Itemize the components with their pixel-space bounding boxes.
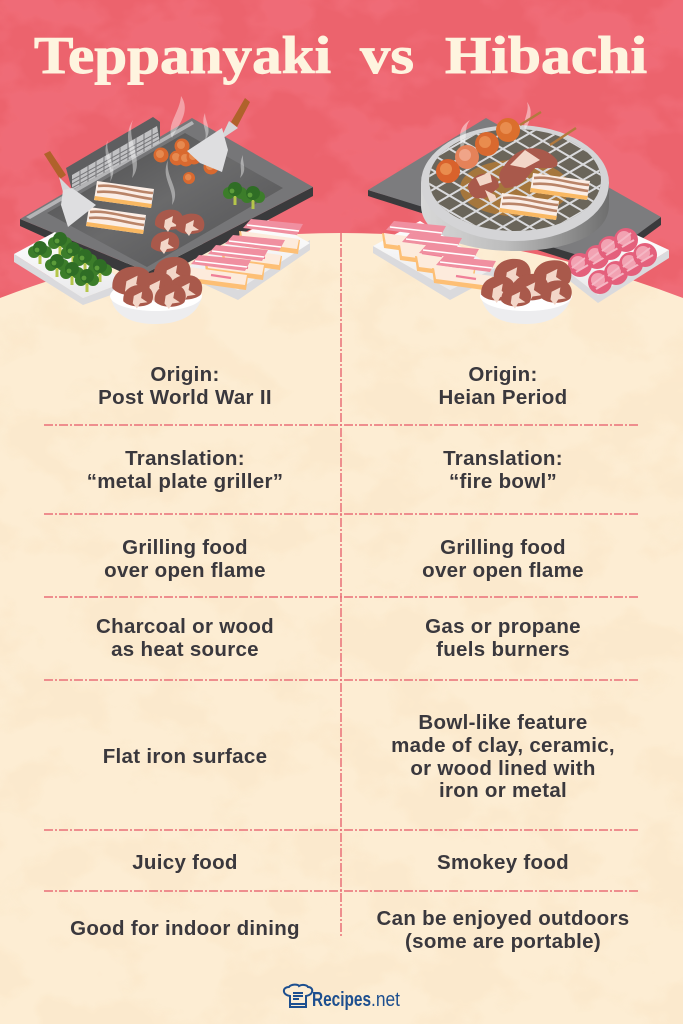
row: heat source: as heat source — [111, 638, 259, 661]
row: dining: Good for indoor dining — [70, 917, 300, 940]
title — [34, 27, 647, 85]
plate of raw bacon — [186, 219, 310, 300]
row: surface: made of clay, ceramic, — [391, 734, 615, 757]
comparison column: Teppanyaki — [70, 363, 300, 940]
row: grilling: over open flame — [104, 559, 266, 582]
spatula right — [187, 98, 250, 172]
title: Teppanyaki — [34, 27, 331, 85]
row: surface: Flat iron surface — [103, 745, 267, 768]
tray — [368, 118, 661, 270]
row: translation: Translation: — [125, 447, 245, 470]
row: translation: “metal plate griller” — [87, 470, 283, 493]
background: cream lower panel — [0, 233, 683, 1024]
background texture: cream mottling — [0, 220, 683, 1024]
plate of raw bacon — [373, 221, 496, 300]
skewer of mushrooms — [468, 128, 576, 202]
row: heat source: Charcoal or wood — [96, 615, 274, 638]
griddle plate — [20, 118, 313, 284]
row: translation: “fire bowl” — [449, 470, 557, 493]
bowl of mushrooms — [110, 257, 202, 324]
skewer of meatballs — [436, 112, 541, 183]
title: vs — [360, 27, 414, 85]
grilled bacon — [530, 173, 590, 200]
background texture: red mottling — [0, 0, 683, 310]
cooking meatballs — [154, 138, 218, 184]
comparison column: Hibachi — [377, 363, 629, 953]
steam — [105, 96, 244, 205]
row: food: Juicy food — [132, 851, 238, 874]
round grill — [421, 125, 609, 251]
row: heat source: fuels burners — [436, 638, 570, 661]
cooking bacon — [94, 181, 154, 208]
steam — [460, 102, 531, 150]
row: heat source: Gas or propane — [425, 615, 581, 638]
row: food: Smokey food — [437, 851, 569, 874]
row: dining: Can be enjoyed outdoors — [377, 907, 629, 930]
plate of raw meat — [566, 228, 669, 303]
vent behind griddle — [66, 117, 160, 195]
dividers — [44, 233, 640, 936]
plate of broccoli — [14, 232, 125, 305]
row: surface: iron or metal — [439, 779, 567, 802]
logo: Recipes.net — [284, 985, 400, 1011]
row: grilling: Grilling food — [440, 536, 566, 559]
row: dining: (some are portable) — [405, 930, 601, 953]
title: Hibachi — [445, 27, 647, 85]
row: origin: Origin: — [468, 363, 538, 386]
row: origin: Post World War II — [98, 386, 272, 409]
illustration: hibachi grill and plates — [368, 102, 669, 324]
row: grilling: Grilling food — [122, 536, 248, 559]
logo: Recipes.net: Recipes — [312, 989, 371, 1011]
bowl of mushrooms — [480, 259, 572, 324]
cooking broccoli — [223, 182, 265, 209]
row: grilling: over open flame — [422, 559, 584, 582]
grill mesh — [429, 129, 601, 231]
logo: Recipes.net: .net — [371, 989, 400, 1011]
icon: chef hat book — [284, 985, 312, 1007]
row: surface: Bowl-like feature — [418, 711, 588, 734]
row: origin: Heian Period — [439, 386, 567, 409]
cooking mushrooms — [151, 210, 204, 254]
row: origin: Origin: — [150, 363, 220, 386]
spatula left — [44, 151, 96, 227]
row: surface: or wood lined with — [410, 757, 596, 780]
illustration: teppanyaki griddle and plates — [14, 96, 313, 324]
row: translation: Translation: — [443, 447, 563, 470]
